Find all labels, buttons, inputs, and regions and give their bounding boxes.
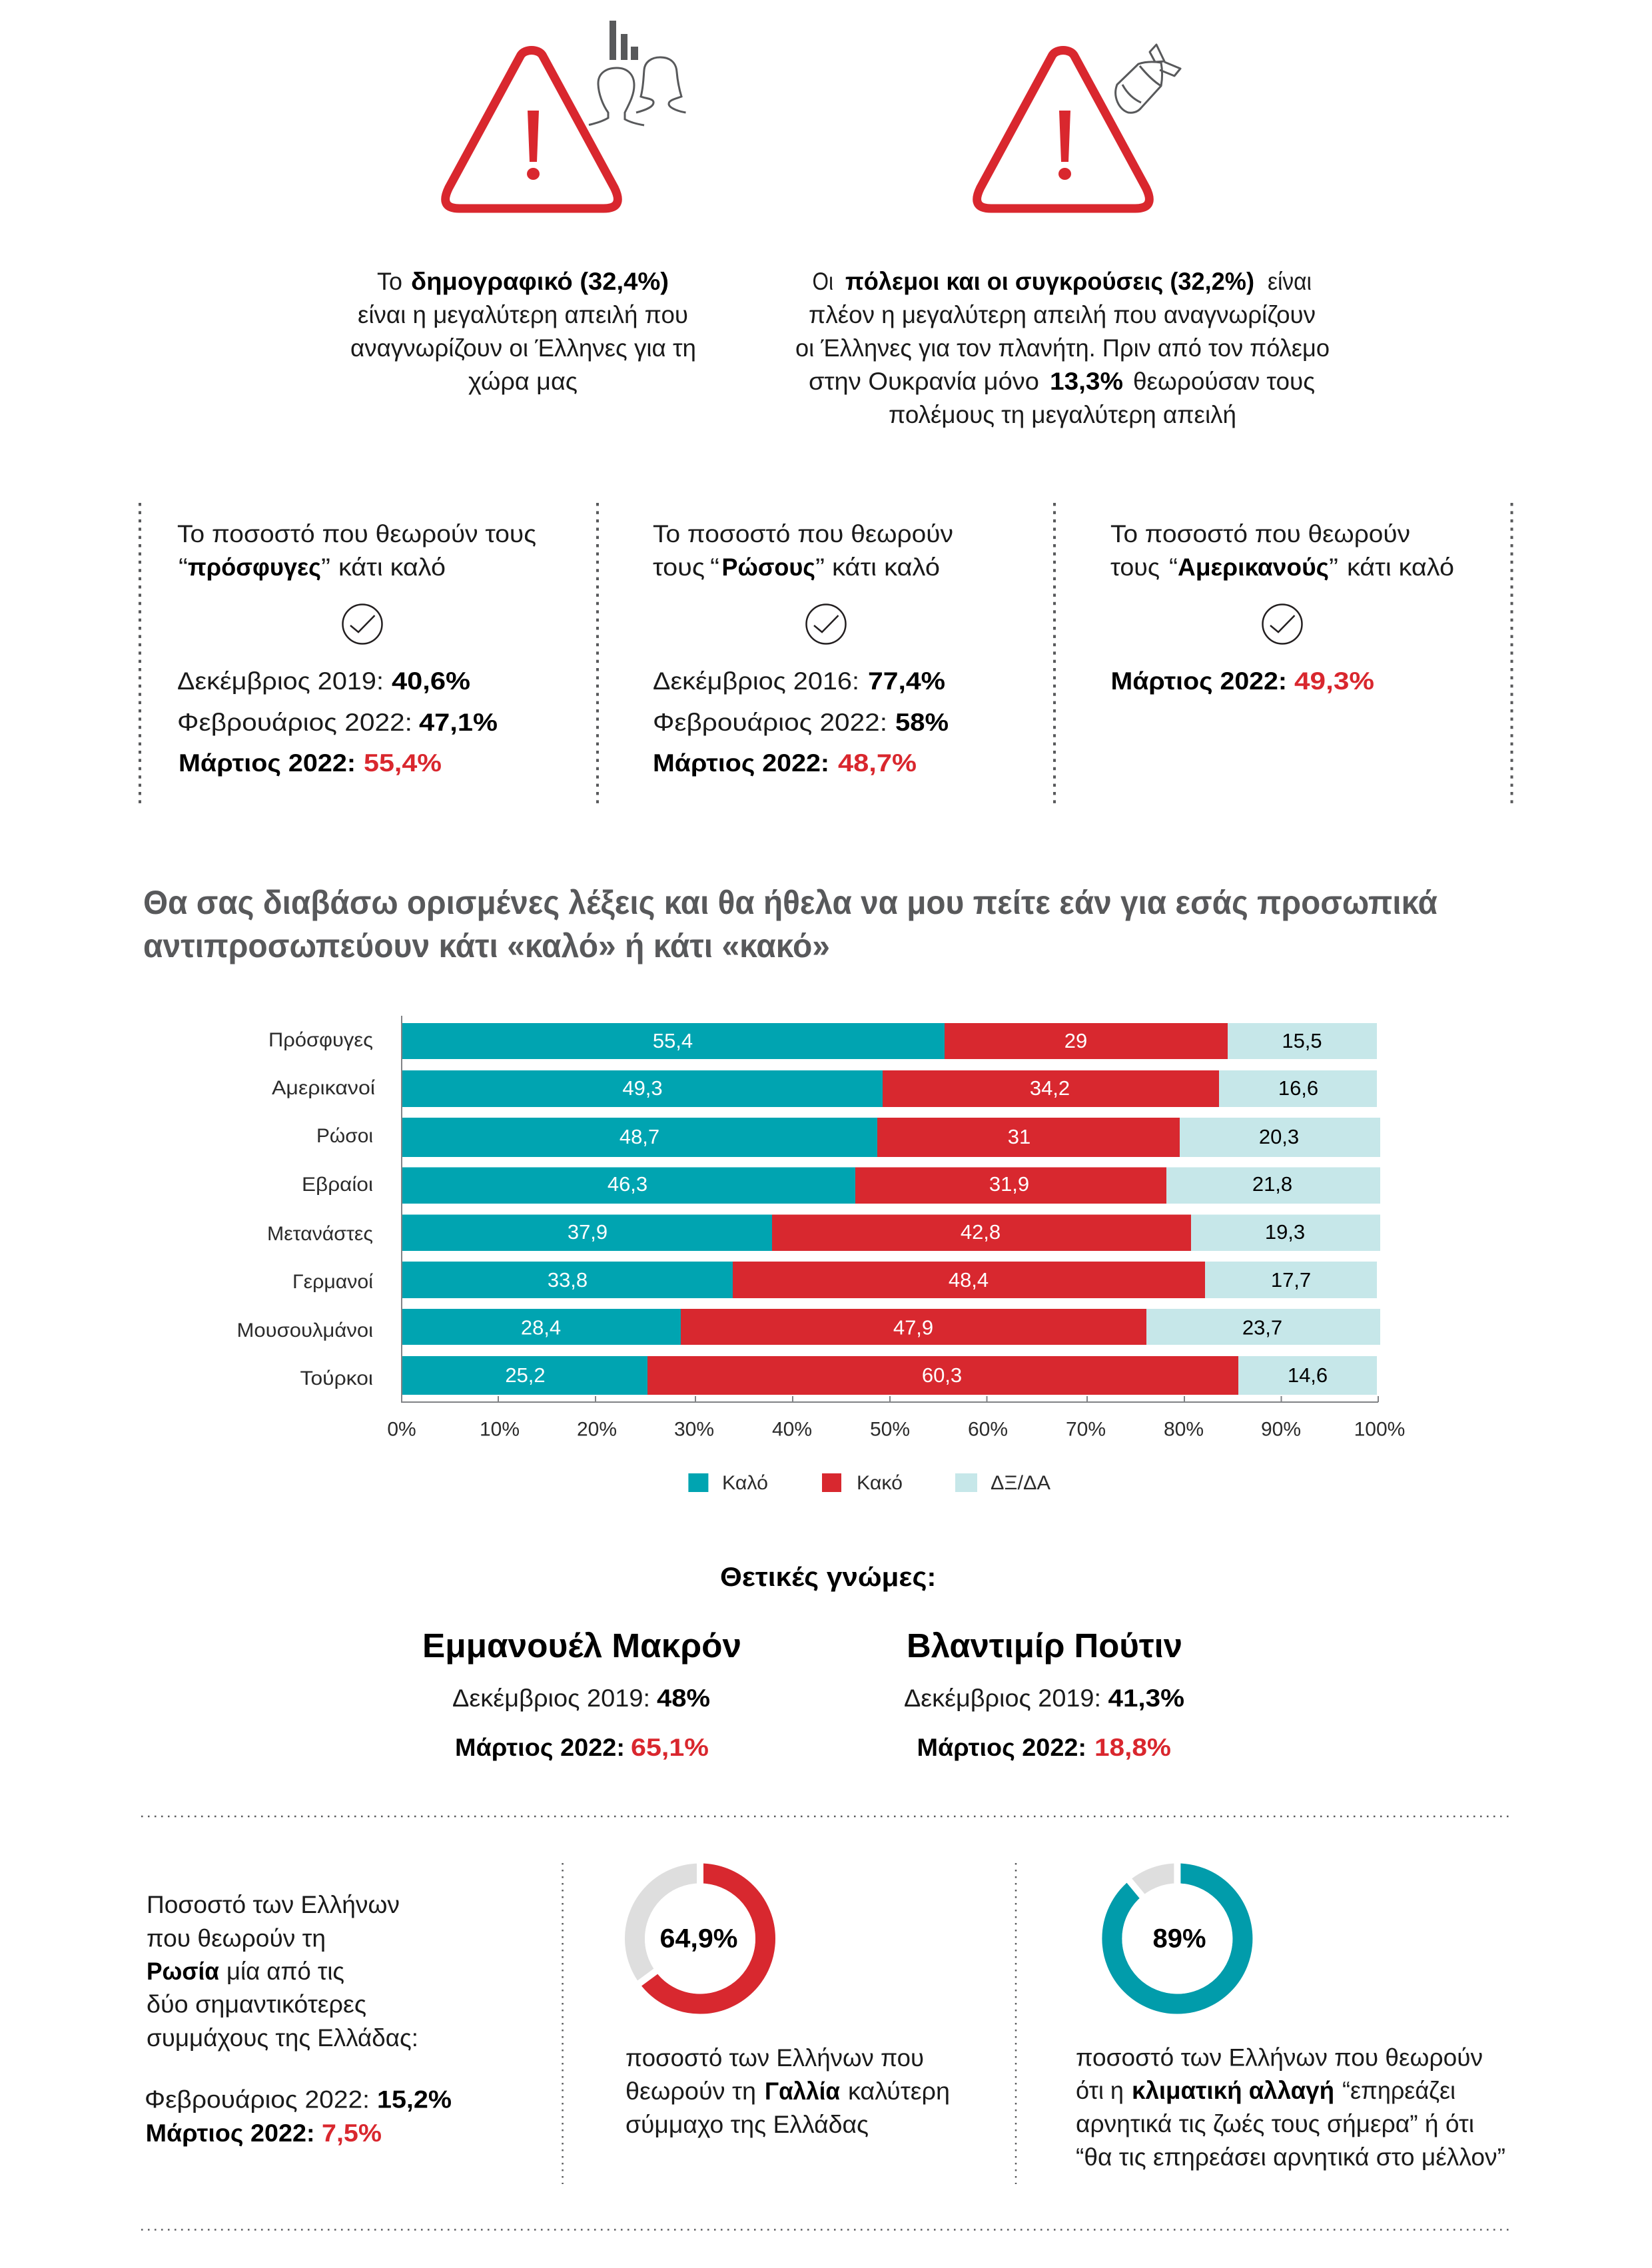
- card values: Russians: [653, 667, 949, 777]
- card values: Americans: [1111, 667, 1374, 695]
- panel: refugees card: [140, 503, 536, 805]
- card values: Russians: Φεβρουάριος 2022:: [653, 709, 887, 736]
- text: wars statement: οι Έλληνες για τον πλανήτη. Πριν από τον πόλεμο: [795, 334, 1330, 362]
- chart legend: Κακό: [857, 1472, 903, 1494]
- opinion: Macron: 65,1%: [631, 1734, 709, 1761]
- opinion: Putin: Βλαντιμίρ Πούτιν: [907, 1627, 1182, 1665]
- stacked bar chart: [237, 1016, 1405, 1494]
- row: Γερμανοί: [292, 1262, 1377, 1298]
- icon: check mark: [1263, 605, 1302, 643]
- card heading: Russians: κάτι καλό: [832, 554, 940, 581]
- opinion: Macron: 48%: [657, 1685, 710, 1712]
- card values: refugees: [177, 667, 498, 777]
- caption: climate change: ότι η: [1076, 2077, 1124, 2104]
- text: wars statement: πολέμους τη μεγαλύτερη απειλή: [889, 401, 1236, 428]
- chart axes: 40%: [772, 1419, 812, 1441]
- chart axes: 50%: [870, 1419, 910, 1441]
- panel: France as ally: [625, 1854, 950, 2138]
- card heading: refugees: κάτι καλό: [338, 554, 446, 581]
- caption: France: ποσοστό των Ελλήνων που: [625, 2044, 924, 2072]
- text: wars statement: στην Ουκρανία μόνο: [809, 368, 1039, 395]
- card heading: refugees: “: [179, 554, 188, 581]
- heading: chart question: Θα σας διαβάσω ορισμένες λέξεις και θα ήθελα να μου πείτε εάν για εσάς προσωπικά: [143, 884, 1438, 921]
- opinion: Putin: Δεκέμβριος 2019:: [904, 1685, 1101, 1712]
- row: Μουσουλμάνοι: [237, 1309, 1380, 1345]
- row: Πρόσφυγες: Πρόσφυγες: [268, 1029, 373, 1051]
- panel: Russia as ally: δύο σημαντικότερες: [147, 1990, 366, 2018]
- row: Μουσουλμάνοι: 28,4: [521, 1316, 561, 1339]
- text: demographic statement: δημογραφικό (32,4%): [411, 268, 669, 295]
- card heading: Americans: Το ποσοστό που θεωρούν: [1110, 520, 1410, 548]
- card values: Americans: Μάρτιος 2022:: [1111, 667, 1287, 695]
- card values: refugees: 40,6%: [392, 667, 470, 695]
- card heading: Americans: κάτι καλό: [1347, 554, 1454, 581]
- row: Μετανάστες: 37,9: [568, 1220, 608, 1244]
- text: wars statement: θεωρούσαν τους: [1133, 368, 1315, 395]
- text: wars statement: πόλεμοι και οι συγκρούσεις (32,2%): [845, 268, 1254, 295]
- chart axes: 30%: [674, 1419, 714, 1441]
- opinion: Macron: Εμμανουέλ Μακρόν: [422, 1627, 741, 1665]
- chart axes: 80%: [1164, 1419, 1204, 1441]
- row: Ρώσοι: 48,7: [620, 1125, 659, 1148]
- row: Πρόσφυγες: 55,4: [653, 1029, 693, 1052]
- chart legend: [688, 1472, 1050, 1494]
- chart legend: ΔΞ/ΔΑ: [991, 1472, 1050, 1494]
- panel: Russians card: [598, 503, 953, 805]
- card heading: Russians: Το ποσοστό που θεωρούν: [653, 520, 953, 548]
- caption: climate change: ποσοστό των Ελλήνων που θεωρούν: [1076, 2044, 1483, 2072]
- row: Εβραίοι: 21,8: [1252, 1172, 1292, 1196]
- caption: France: σύμμαχο της Ελλάδας: [625, 2111, 869, 2138]
- card heading: Russians: “: [710, 554, 719, 581]
- opinion: Macron: [422, 1627, 741, 1761]
- opinion: Putin: 41,3%: [1108, 1685, 1184, 1712]
- opinion: Putin: Μάρτιος 2022:: [917, 1734, 1086, 1761]
- row: Μετανάστες: Μετανάστες: [267, 1223, 373, 1245]
- card heading: refugees: ”: [321, 554, 330, 581]
- card values: refugees: 55,4%: [364, 749, 442, 777]
- chart axes: 70%: [1066, 1419, 1106, 1441]
- row: Εβραίοι: 31,9: [989, 1172, 1029, 1196]
- panel: demographic threat: [350, 21, 696, 395]
- heading: chart question: αντιπροσωπεύουν κάτι «καλό» ή κάτι «κακό»: [143, 927, 830, 964]
- panel: Russia as ally: συμμάχους της Ελλάδας:: [147, 2024, 418, 2052]
- text: wars statement: 13,3%: [1050, 368, 1123, 395]
- panel: Russia as ally: που θεωρούν τη: [147, 1925, 326, 1952]
- card heading: Russians: ”: [815, 554, 825, 581]
- text: demographic statement: [350, 268, 696, 395]
- row: Τούρκοι: 25,2: [505, 1363, 546, 1387]
- card heading: Russians: τους: [653, 554, 705, 581]
- panel: positive opinions: [422, 1563, 1184, 1761]
- row: Πρόσφυγες: 15,5: [1282, 1029, 1322, 1052]
- caption: France: καλύτερη: [848, 2078, 950, 2105]
- row: Γερμανοί: 17,7: [1271, 1268, 1311, 1292]
- card heading: refugees: πρόσφυγες: [188, 554, 321, 581]
- card values: Americans: 49,3%: [1294, 667, 1374, 695]
- card heading: Russians: Ρώσους: [722, 554, 815, 581]
- panel: Russia as ally: Ποσοστό των Ελλήνων: [147, 1891, 400, 1918]
- icon: warning triangle with bomb: [977, 45, 1180, 208]
- donut chart: 89%: 89%: [1152, 1924, 1206, 1953]
- row: Τούρκοι: 60,3: [922, 1363, 962, 1387]
- row: Μουσουλμάνοι: 47,9: [893, 1316, 933, 1339]
- row: Αμερικανοί: 34,2: [1030, 1076, 1070, 1100]
- panel: climate change: [1076, 1854, 1505, 2171]
- row: Μετανάστες: [267, 1215, 1380, 1251]
- card heading: Americans: Αμερικανούς: [1178, 554, 1329, 581]
- row: Μουσουλμάνοι: 23,7: [1242, 1316, 1282, 1339]
- heading: chart question: [143, 884, 1438, 964]
- row: Ρώσοι: 31: [1008, 1125, 1031, 1148]
- text: wars statement: [795, 268, 1330, 428]
- row: Πρόσφυγες: [268, 1023, 1377, 1059]
- text: demographic statement: αναγνωρίζουν οι Έλληνες για τη: [350, 334, 696, 362]
- card heading: Americans: [1110, 520, 1454, 581]
- row: Μετανάστες: 19,3: [1265, 1220, 1305, 1244]
- row: Τούρκοι: Τούρκοι: [300, 1367, 373, 1389]
- text: demographic statement: Το: [377, 268, 402, 295]
- donut chart: 89%: [1112, 1854, 1242, 2004]
- row: Εβραίοι: [302, 1167, 1380, 1204]
- icon: check mark: [342, 605, 382, 643]
- card heading: refugees: Το ποσοστό που θεωρούν τους: [177, 520, 536, 548]
- panel: Americans card: [1054, 503, 1512, 805]
- panel: wars threat: [795, 45, 1330, 428]
- panel: Russia as ally: [145, 1891, 452, 2147]
- card heading: refugees: [177, 520, 536, 581]
- card values: Russians: Δεκέμβριος 2016:: [653, 667, 859, 695]
- icon: check mark: [806, 605, 846, 643]
- chart axes: 100%: [1354, 1419, 1405, 1441]
- card values: refugees: 47,1%: [419, 709, 498, 736]
- heading: positive opinions: Θετικές γνώμες:: [720, 1563, 937, 1592]
- row: Εβραίοι: 46,3: [608, 1172, 647, 1196]
- card heading: Americans: ”: [1329, 554, 1338, 581]
- caption: France: Γαλλία: [765, 2078, 840, 2105]
- caption: climate change: “επηρεάζει: [1342, 2077, 1455, 2104]
- donut chart: 64,9%: [633, 1854, 765, 2004]
- row: Τούρκοι: [300, 1356, 1377, 1395]
- chart axes: 20%: [577, 1419, 617, 1441]
- panel: Russia as ally: Μάρτιος 2022:: [146, 2119, 315, 2147]
- chart axes: 60%: [968, 1419, 1008, 1441]
- row: Γερμανοί: 33,8: [548, 1268, 588, 1292]
- chart legend: Καλό: [722, 1472, 768, 1494]
- card heading: Americans: τους: [1110, 554, 1160, 581]
- card heading: Russians: [653, 520, 953, 581]
- opinion: Putin: 18,8%: [1094, 1734, 1171, 1761]
- chart axes: 90%: [1261, 1419, 1301, 1441]
- opinion: Putin: [904, 1627, 1184, 1761]
- card values: refugees: Φεβρουάριος 2022:: [177, 709, 412, 736]
- row: Γερμανοί: Γερμανοί: [292, 1271, 373, 1293]
- row: Πρόσφυγες: 29: [1064, 1029, 1087, 1052]
- card values: Russians: Μάρτιος 2022:: [653, 749, 829, 777]
- text: wars statement: Οι: [813, 268, 833, 295]
- chart axes: 0%: [387, 1419, 416, 1441]
- panel: Russia as ally: 7,5%: [322, 2119, 382, 2147]
- donut chart: 64,9%: 64,9%: [659, 1924, 738, 1953]
- text: wars statement: είναι: [1268, 268, 1312, 295]
- row: Τούρκοι: 14,6: [1288, 1363, 1328, 1387]
- row: Αμερικανοί: Αμερικανοί: [272, 1077, 375, 1099]
- text: demographic statement: χώρα μας: [468, 368, 578, 395]
- chart axes: [387, 1016, 1405, 1441]
- panel: Russia as ally: Ρωσία: [147, 1958, 219, 1985]
- row: Αμερικανοί: [272, 1070, 1377, 1107]
- caption: France: θεωρούν τη: [625, 2078, 756, 2105]
- card heading: Americans: “: [1169, 554, 1178, 581]
- caption: climate change: κλιματική αλλαγή: [1132, 2077, 1334, 2104]
- caption: climate change: [1076, 2044, 1505, 2171]
- opinion: Macron: Μάρτιος 2022:: [455, 1734, 625, 1761]
- panel: Russia as ally: 15,2%: [377, 2086, 452, 2113]
- card values: Russians: 58%: [895, 709, 949, 736]
- text: wars statement: πλέον η μεγαλύτερη απειλή που αναγνωρίζουν: [809, 301, 1316, 328]
- row: Εβραίοι: Εβραίοι: [302, 1174, 373, 1196]
- row: Ρώσοι: Ρώσοι: [316, 1125, 373, 1147]
- chart axes: 10%: [480, 1419, 520, 1441]
- icon: warning triangle with people: [446, 21, 686, 208]
- caption: climate change: αρνητικά τις ζωές τους σήμερα” ή ότι: [1076, 2110, 1474, 2137]
- row: Αμερικανοί: 16,6: [1278, 1076, 1318, 1100]
- card values: Russians: 48,7%: [838, 749, 917, 777]
- row: Γερμανοί: 48,4: [949, 1268, 989, 1292]
- row: Ρώσοι: 20,3: [1259, 1125, 1299, 1148]
- row: Μουσουλμάνοι: Μουσουλμάνοι: [237, 1320, 373, 1341]
- opinion: Macron: Δεκέμβριος 2019:: [452, 1685, 650, 1712]
- card values: refugees: Δεκέμβριος 2019:: [177, 667, 384, 695]
- row: Ρώσοι: [316, 1118, 1380, 1157]
- caption: France: [625, 2044, 950, 2138]
- card values: Russians: 77,4%: [868, 667, 945, 695]
- text: demographic statement: είναι η μεγαλύτερη απειλή που: [358, 301, 688, 328]
- panel: Russia as ally: μία από τις: [226, 1958, 344, 1985]
- row: Μετανάστες: 42,8: [961, 1220, 1001, 1244]
- card values: refugees: Μάρτιος 2022:: [179, 749, 356, 777]
- caption: climate change: “θα τις επηρεάσει αρνητικά στο μέλλον”: [1076, 2143, 1505, 2171]
- panel: Russia as ally: Φεβρουάριος 2022:: [145, 2086, 370, 2113]
- row: Αμερικανοί: 49,3: [622, 1076, 663, 1100]
